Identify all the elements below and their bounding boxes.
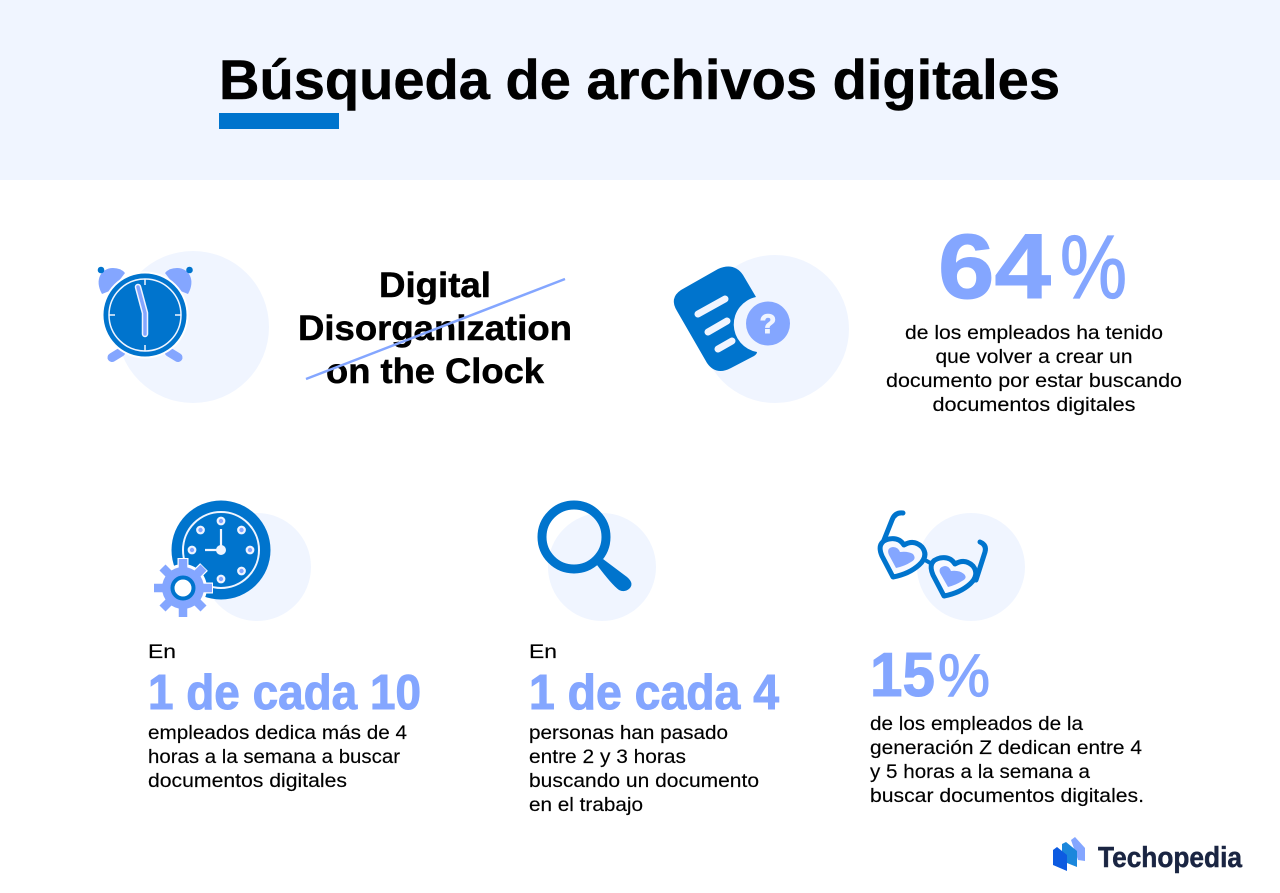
stat description: que volver a crear un xyxy=(936,346,1132,368)
stat description: documentos digitales xyxy=(932,394,1136,416)
stat description: de los empleados ha tenido xyxy=(905,322,1163,344)
heading: digital disorganization xyxy=(298,266,572,391)
text: 15%: generación Z dedican entre 4 xyxy=(870,737,1142,759)
text: 1 de cada 4: En xyxy=(529,641,557,663)
text: 1 de cada 4: buscando un documento xyxy=(529,770,759,792)
text: 15%: de los empleados de la xyxy=(870,713,1083,735)
text: 1 de cada 4: en el trabajo xyxy=(529,794,643,816)
icon: document with question mark xyxy=(674,255,849,403)
stat: 64% xyxy=(886,216,1182,416)
text: 1 de cada 10: En xyxy=(148,641,176,663)
text: 1 de cada 10 xyxy=(148,641,421,792)
text: 1 de cada 4: 1 de cada 4 xyxy=(529,666,779,720)
logo: Techopedia: Techopedia xyxy=(1098,842,1243,874)
strike line xyxy=(306,279,565,379)
text: 15%: % xyxy=(938,642,990,709)
icon: magnifying glass xyxy=(542,505,656,621)
stat: 64%: 64 xyxy=(938,216,1051,318)
icon: alarm clock xyxy=(98,251,269,403)
text: 1 de cada 4: personas han pasado xyxy=(529,722,728,744)
header band xyxy=(0,0,1280,180)
heading: digital disorganization: Disorganization xyxy=(298,309,572,348)
text: 1 de cada 10: empleados dedica más de 4 xyxy=(148,722,407,744)
icon: document with question mark: ? xyxy=(760,309,776,339)
text: 1 de cada 10: horas a la semana a buscar xyxy=(148,746,401,768)
heading: digital disorganization: Digital xyxy=(379,266,491,305)
stat description xyxy=(886,322,1182,416)
text: 1 de cada 10: documentos digitales xyxy=(148,770,347,792)
stat: 64%: % xyxy=(1060,218,1127,318)
text: 15%: buscar documentos digitales. xyxy=(870,785,1144,807)
text: 15%: 15 xyxy=(870,641,935,710)
heading: digital disorganization: on the Clock xyxy=(326,352,545,391)
stat description: documento por estar buscando xyxy=(886,370,1182,392)
text: 15% xyxy=(870,641,1144,807)
text: 1 de cada 4 xyxy=(529,641,779,816)
title: Búsqueda de archivos digitales xyxy=(219,48,1060,111)
icon: clock with gear xyxy=(153,500,311,621)
text: 1 de cada 10: 1 de cada 10 xyxy=(148,666,421,720)
icon: heart glasses xyxy=(880,513,1025,621)
logo: Techopedia xyxy=(1053,837,1243,874)
text: 15%: y 5 horas a la semana a xyxy=(870,761,1090,783)
text: 1 de cada 4: entre 2 y 3 horas xyxy=(529,746,686,768)
title underline xyxy=(219,113,339,129)
